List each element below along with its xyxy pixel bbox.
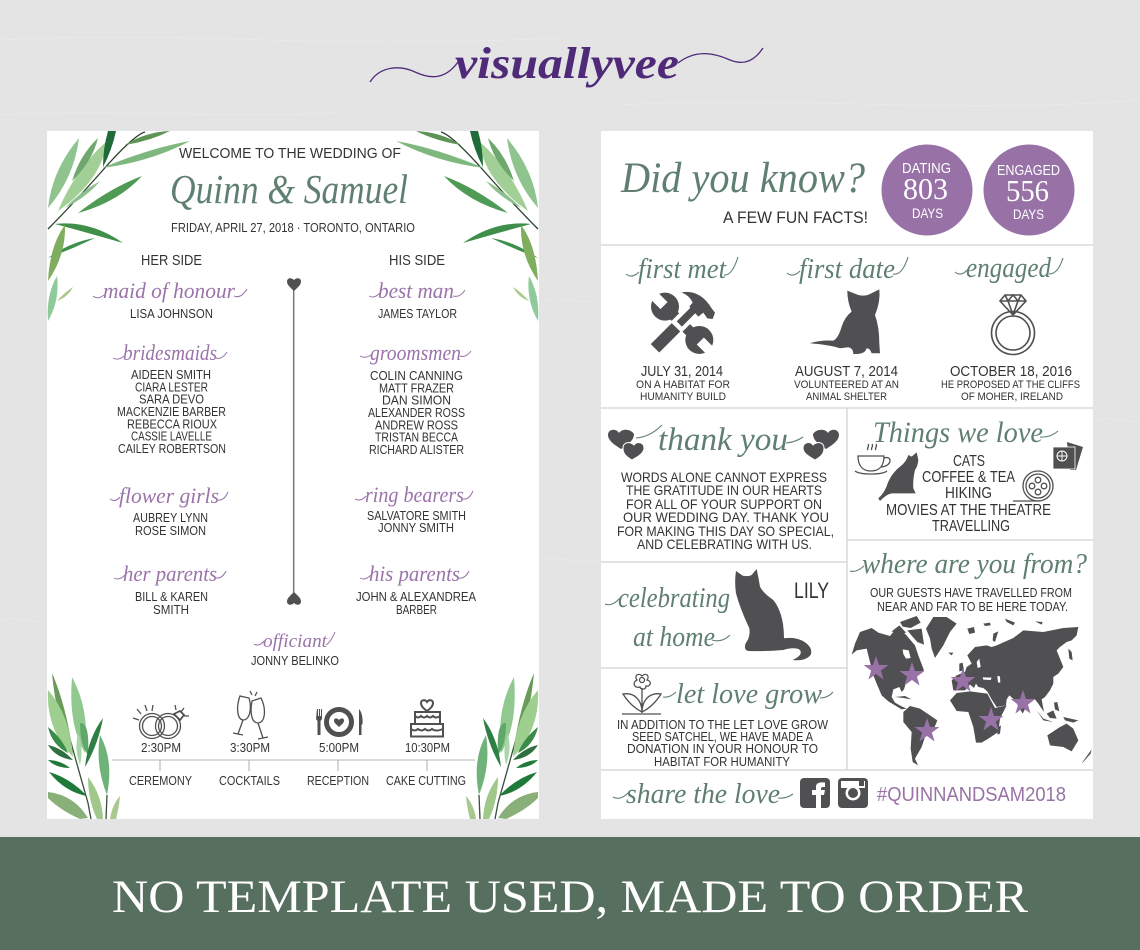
top-left foliage xyxy=(48,131,190,321)
her parents: her parents xyxy=(123,561,217,586)
section: celebrating at home xyxy=(605,569,829,660)
section: things we love: TRAVELLING xyxy=(932,518,1010,535)
groomsmen: MATT FRAZER xyxy=(379,381,454,395)
badge: dating 803 days: 803 xyxy=(903,171,948,206)
ring bearers: JONNY SMITH xyxy=(378,521,454,535)
section: let love grow: HABITAT FOR HUMANITY xyxy=(654,754,790,769)
fact: first date: ANIMAL SHELTER xyxy=(806,391,887,403)
her parents: BILL & KAREN xyxy=(135,590,208,604)
footer banner xyxy=(0,837,1140,950)
badge: engaged 556 days xyxy=(984,144,1074,236)
flower girls: flower girls xyxy=(119,483,219,508)
timeline: 3:30PM xyxy=(230,741,270,755)
icon: flower xyxy=(622,674,661,714)
title block: Quinn & Samuel xyxy=(170,166,408,212)
section: things we love: HIKING xyxy=(945,485,992,502)
icon: hammer and wrench xyxy=(648,290,717,357)
heading: did you know xyxy=(620,155,868,227)
footer: share the love: share the love xyxy=(626,778,780,810)
icon: diamond ring xyxy=(992,295,1034,354)
central divider with hearts xyxy=(287,278,301,605)
icon: left hearts xyxy=(608,430,644,460)
bridesmaids: SARA DEVO xyxy=(139,393,204,407)
best man: best man xyxy=(378,278,454,303)
top-right foliage xyxy=(396,131,538,321)
heading: did you know: Did you know? xyxy=(620,155,865,202)
fact: first date: first date xyxy=(799,254,895,285)
bottom-right foliage xyxy=(466,673,538,819)
groomsmen: COLIN CANNING xyxy=(370,369,463,383)
bottom-left foliage xyxy=(48,673,120,819)
groomsmen: RICHARD ALISTER xyxy=(369,443,464,457)
fact: first date: VOLUNTEERED AT AN xyxy=(794,379,899,391)
bridesmaids: CIARA LESTER xyxy=(135,380,208,394)
icon: sitting cat xyxy=(735,569,811,660)
section: where are you from: OUR GUESTS HAVE TRAVELLED FROM xyxy=(870,585,1072,600)
fact: first met: ON A HABITAT FOR xyxy=(636,379,730,391)
icon: facebook xyxy=(800,778,830,808)
best man xyxy=(369,278,465,321)
section: thank you: AND CELEBRATING WITH US. xyxy=(637,536,812,552)
bridesmaids: bridesmaids xyxy=(123,340,217,365)
brand logo: visuallyvee xyxy=(370,39,763,88)
icon: film reel xyxy=(1013,471,1053,501)
fact: first met xyxy=(626,254,738,403)
section: thank you: WORDS ALONE CANNOT EXPRESS xyxy=(621,469,827,485)
section: things we love xyxy=(855,416,1083,535)
icon: champagne glasses xyxy=(233,691,268,739)
timeline: 10:30PM xyxy=(405,741,450,755)
section: thank you: THE GRATITUDE IN OUR HEARTS xyxy=(626,482,822,498)
fact: engaged: HE PROPOSED AT THE CLIFFS xyxy=(941,379,1080,391)
section: things we love: COFFEE & TEA xyxy=(922,469,1016,486)
section: let love grow: DONATION IN YOUR HONOUR TO xyxy=(627,741,818,756)
officiant xyxy=(251,631,339,668)
fact: first met: first met xyxy=(638,254,727,285)
bridesmaids: CAILEY ROBERTSON xyxy=(118,442,226,456)
groomsmen: ALEXANDER ROSS xyxy=(368,406,465,420)
footer: share the love: #QUINNANDSAM2018 xyxy=(877,784,1066,806)
icon: small cat xyxy=(878,452,918,501)
badge: dating 803 days xyxy=(882,144,972,236)
timeline: RECEPTION xyxy=(307,774,369,788)
title block: WELCOME TO THE WEDDING OF xyxy=(179,145,401,162)
world map xyxy=(852,616,1092,765)
bridesmaids xyxy=(113,340,227,456)
bridesmaids: REBECCA RIOUX xyxy=(127,417,218,431)
footer banner: NO TEMPLATE USED, MADE TO ORDER xyxy=(112,871,1029,923)
icon: plate and cutlery xyxy=(316,709,363,735)
section: celebrating at home: at home xyxy=(633,621,715,653)
officiant: JONNY BELINKO xyxy=(251,654,339,668)
icon: right hearts xyxy=(803,430,839,460)
panel: wedding program xyxy=(47,131,539,819)
section: let love grow: SEED SATCHEL, WE HAVE MADE A xyxy=(632,729,813,744)
icon: kitten xyxy=(810,289,880,354)
section: where are you from: where are you from? xyxy=(862,548,1087,580)
his parents xyxy=(356,561,477,617)
timeline: CAKE CUTTING xyxy=(386,774,466,788)
footer: share the love xyxy=(613,778,1066,810)
his parents: his parents xyxy=(369,561,460,586)
fact: engaged: engaged xyxy=(966,253,1052,284)
section: celebrating at home: celebrating xyxy=(618,582,730,614)
groomsmen: DAN SIMON xyxy=(382,394,451,408)
her parents: SMITH xyxy=(153,603,189,617)
panel: did you know fun facts xyxy=(601,131,1093,819)
ring bearers xyxy=(355,482,473,535)
section: let love grow: IN ADDITION TO THE LET LOVE GROW xyxy=(617,717,829,732)
officiant: officiant xyxy=(263,631,328,652)
fact: first met: HUMANITY BUILD xyxy=(640,391,726,403)
badge: dating 803 days: DAYS xyxy=(912,205,943,221)
fact: first date xyxy=(787,254,908,403)
fact: engaged xyxy=(941,253,1080,403)
her parents xyxy=(114,561,226,617)
section: thank you: FOR ALL OF YOUR SUPPORT ON xyxy=(626,496,822,512)
his parents: BARBER xyxy=(396,603,437,617)
flower girls: AUBREY LYNN xyxy=(133,511,208,525)
icon: coffee cup xyxy=(855,444,890,474)
badge: dating 803 days: DATING xyxy=(902,161,951,177)
fact: first date: AUGUST 7, 2014 xyxy=(795,363,898,380)
maid of honour: maid of honour xyxy=(103,278,235,303)
his parents: JOHN & ALEXANDREA xyxy=(356,590,477,604)
bridesmaids: CASSIE LAVELLE xyxy=(131,430,212,444)
badge: engaged 556 days: 556 xyxy=(1006,173,1049,208)
icon: wedding rings xyxy=(133,705,189,738)
section: where are you from: NEAR AND FAR TO BE HERE TODAY. xyxy=(877,599,1068,614)
section: things we love: Things we love xyxy=(873,416,1043,449)
her side heading: HER SIDE xyxy=(141,252,202,269)
brand logo: visuallyvee: visuallyvee xyxy=(455,39,679,88)
badge: engaged 556 days: DAYS xyxy=(1013,206,1044,222)
flower girls xyxy=(110,483,228,538)
fact: engaged: OF MOHER, IRELAND xyxy=(961,391,1063,403)
heading: did you know: A FEW FUN FACTS! xyxy=(723,208,868,227)
icon: passport and tickets xyxy=(1053,442,1083,470)
section: let love grow xyxy=(617,674,833,769)
ring bearers: SALVATORE SMITH xyxy=(367,509,466,523)
timeline: 5:00PM xyxy=(319,741,359,755)
timeline xyxy=(112,741,475,788)
flower girls: ROSE SIMON xyxy=(135,524,206,538)
icon: instagram xyxy=(838,778,868,808)
section: thank you xyxy=(608,422,839,552)
fact: first met: JULY 31, 2014 xyxy=(641,363,723,380)
icon: wedding cake xyxy=(411,700,443,736)
groomsmen: ANDREW ROSS xyxy=(375,418,458,432)
bridesmaids: MACKENZIE BARBER xyxy=(117,405,226,419)
section: let love grow: let love grow xyxy=(676,679,822,710)
groomsmen: TRISTAN BECCA xyxy=(375,431,459,445)
section: thank you: thank you xyxy=(658,422,788,458)
bridesmaids: AIDEEN SMITH xyxy=(131,368,211,382)
timeline: CEREMONY xyxy=(129,774,193,788)
section: thank you: OUR WEDDING DAY. THANK YOU xyxy=(623,509,829,525)
maid of honour: LISA JOHNSON xyxy=(130,307,213,321)
map stars xyxy=(864,656,1035,742)
badge: engaged 556 days: ENGAGED xyxy=(997,163,1060,179)
section: things we love: MOVIES AT THE THEATRE xyxy=(886,502,1051,519)
section: celebrating at home: LILY xyxy=(794,578,829,603)
section: things we love: CATS xyxy=(953,453,985,470)
best man: JAMES TAYLOR xyxy=(378,307,457,321)
maid of honour xyxy=(93,278,247,321)
fact: engaged: OCTOBER 18, 2016 xyxy=(950,363,1072,380)
title block xyxy=(170,145,415,235)
his side heading: HIS SIDE xyxy=(389,252,445,269)
section: thank you: FOR MAKING THIS DAY SO SPECIAL, xyxy=(617,523,834,539)
section: where are you from xyxy=(850,548,1092,765)
groomsmen: groomsmen xyxy=(370,340,461,365)
ring bearers: ring bearers xyxy=(365,482,464,507)
timeline: 2:30PM xyxy=(141,741,181,755)
title block: FRIDAY, APRIL 27, 2018 · TORONTO, ONTARIO xyxy=(171,220,415,235)
timeline: COCKTAILS xyxy=(219,774,280,788)
groomsmen xyxy=(360,340,471,457)
